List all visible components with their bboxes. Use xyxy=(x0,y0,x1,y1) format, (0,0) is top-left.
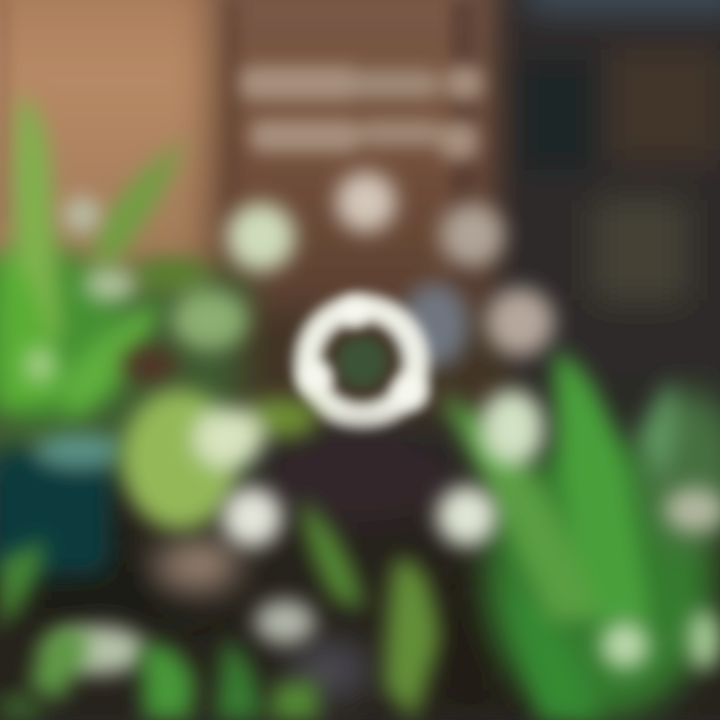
foreground sprouts xyxy=(0,500,440,720)
sign: row of pale circles xyxy=(227,172,554,367)
centre leaf: pale green xyxy=(122,390,318,530)
sign: blurred lettering on fence xyxy=(240,66,483,160)
small white blossoms xyxy=(54,486,497,674)
recycling ring: white circle xyxy=(299,297,428,416)
left plant: green leaves xyxy=(0,95,248,420)
soil: dark mound xyxy=(10,435,530,710)
teal pot xyxy=(0,434,124,575)
right plant: green leaves xyxy=(440,350,720,720)
